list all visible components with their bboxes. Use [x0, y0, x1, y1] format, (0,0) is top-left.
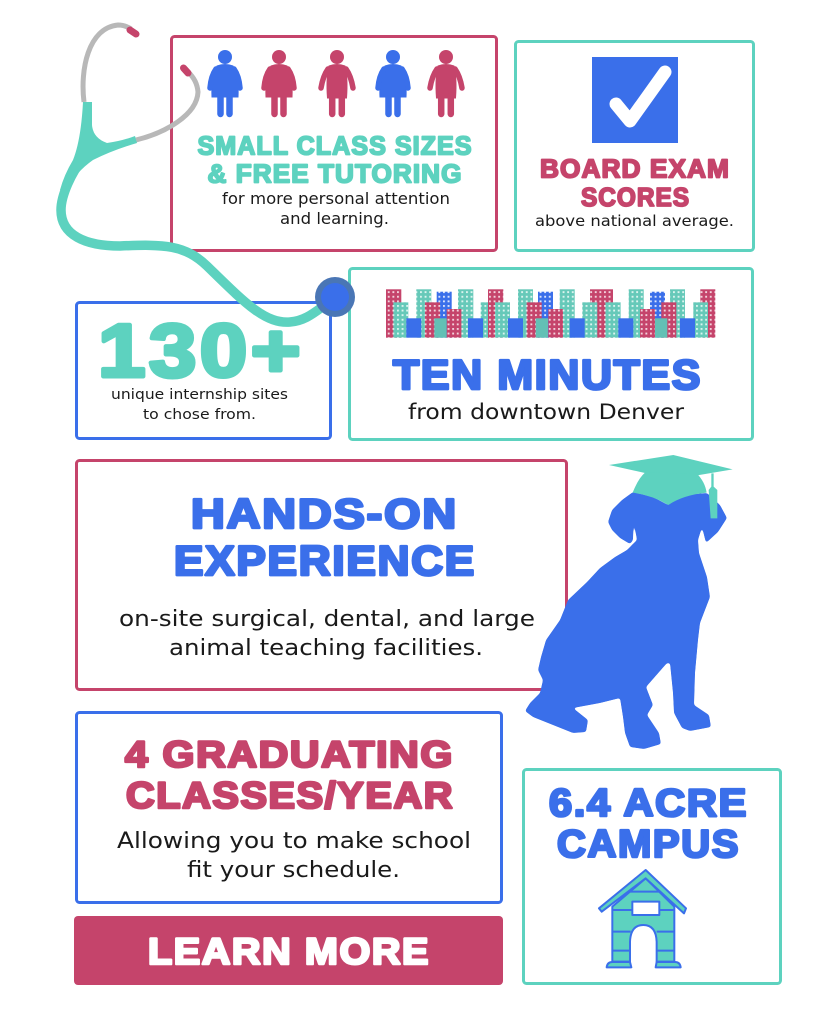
text: from downtown Denver: from downtown Denver	[408, 400, 684, 424]
icon: male student red second	[430, 50, 462, 114]
earpiece tube right	[136, 72, 198, 140]
panel border	[350, 268, 752, 440]
heading: 6.4 acre: 6.4 ACRE	[549, 782, 748, 825]
dog silhouette	[525, 492, 727, 749]
icon: checkbox	[592, 57, 678, 143]
heading: experience: EXPERIENCE	[174, 537, 476, 584]
panel border	[516, 42, 754, 250]
icon: female student blue	[210, 50, 240, 114]
icon: female student blue second	[378, 50, 408, 114]
panel border	[524, 770, 780, 984]
graduation cap	[609, 455, 733, 518]
heading: ten minutes: TEN MINUTES	[393, 351, 702, 398]
heading: campus: CAMPUS	[557, 823, 740, 866]
icon: row of students	[210, 50, 462, 114]
ear tip right	[184, 68, 188, 73]
chest piece	[315, 277, 355, 317]
button: learn more: LEARN MORE	[148, 930, 430, 972]
panel border	[76, 460, 566, 690]
main tube	[61, 160, 325, 322]
panel: board exam scores	[516, 42, 754, 250]
panel: small class sizes	[172, 36, 496, 250]
text: and learning: and learning.	[280, 209, 389, 228]
icon: male student red	[321, 50, 353, 114]
panel: hands-on experience	[76, 460, 566, 690]
panel border	[76, 302, 330, 438]
text: make school fit: Allowing you to make school	[117, 829, 471, 854]
panel: graduating classes	[76, 712, 502, 902]
button: learn more	[74, 916, 503, 985]
tube junction	[60, 102, 137, 190]
heading: classes per year: CLASSES/YEAR	[126, 774, 454, 816]
text: to chose from: to chose from.	[143, 407, 256, 423]
heading: board exam: BOARD EXAM	[540, 156, 730, 184]
earpiece tube left	[83, 25, 131, 102]
heading: scores: SCORES	[581, 184, 690, 212]
icon: female student red	[264, 50, 294, 114]
text: personal attention: for more personal attention	[222, 189, 450, 208]
illustration: stethoscope	[60, 25, 355, 322]
text: your schedule: fit your schedule.	[187, 858, 400, 883]
panel border	[76, 712, 502, 902]
heading: free tutoring: & FREE TUTORING	[208, 160, 462, 188]
panel: internship sites	[76, 302, 330, 438]
panel: ten minutes	[350, 268, 752, 440]
heading: 4 graduating: 4 GRADUATING	[125, 733, 454, 775]
panel border	[172, 36, 496, 250]
stat: 130+: 130+	[98, 308, 304, 392]
icon: city skyline	[386, 289, 715, 338]
ear tip left	[130, 30, 136, 34]
text: on-site facilities line one: on-site surgical, dental, and large	[119, 607, 535, 632]
panel: campus	[524, 770, 780, 984]
text: on-site facilities line two: animal teaching facilities.	[169, 636, 483, 661]
heading: hands-on: HANDS-ON	[191, 490, 458, 537]
text: unique internship sites: unique internship sites	[111, 387, 288, 403]
icon: dog house	[599, 870, 686, 967]
illustration: dog with graduation cap	[525, 455, 733, 749]
text: above national average: above national average.	[535, 212, 734, 230]
heading: small class sizes: SMALL CLASS SIZES	[198, 132, 472, 160]
